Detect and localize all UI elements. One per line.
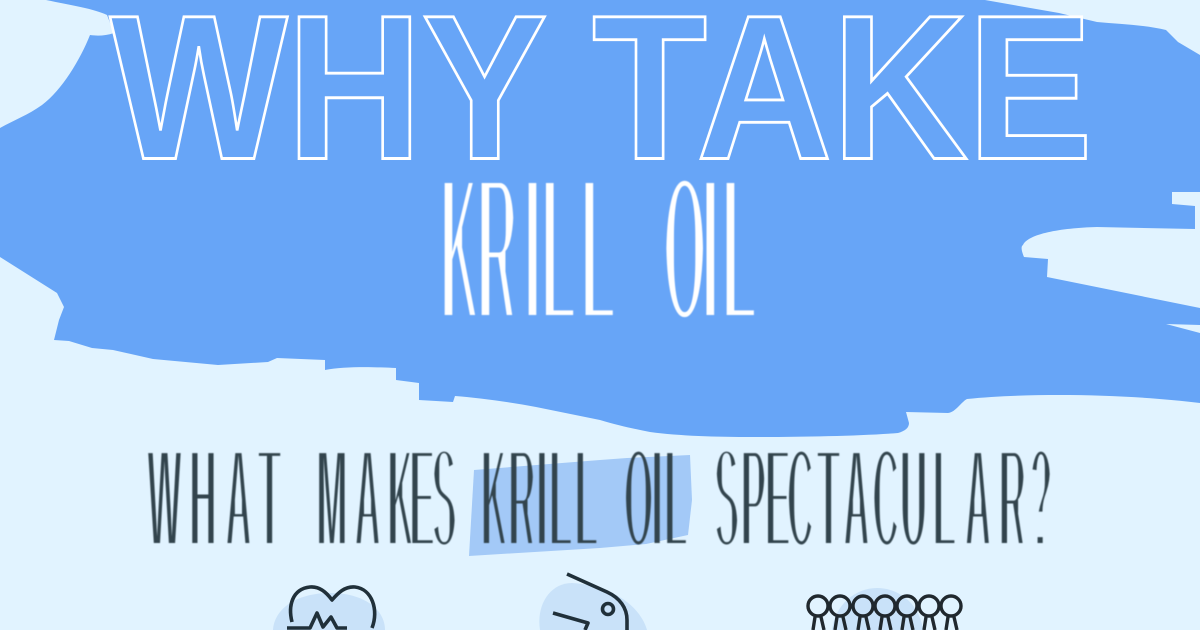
subheading: what makes krill oil spectacular: WHAT MAKES KRILL OIL SPECTACULAR? [147, 415, 1052, 583]
title: KRILL OIL: KRILL OIL [441, 127, 756, 373]
icon: krill head [539, 574, 647, 630]
icon: phospholipid bilayer [808, 588, 961, 630]
icon: heart with pulse [273, 587, 385, 630]
blue brush stroke banner [0, 0, 1200, 437]
highlight behind KRILL OIL [469, 455, 692, 556]
